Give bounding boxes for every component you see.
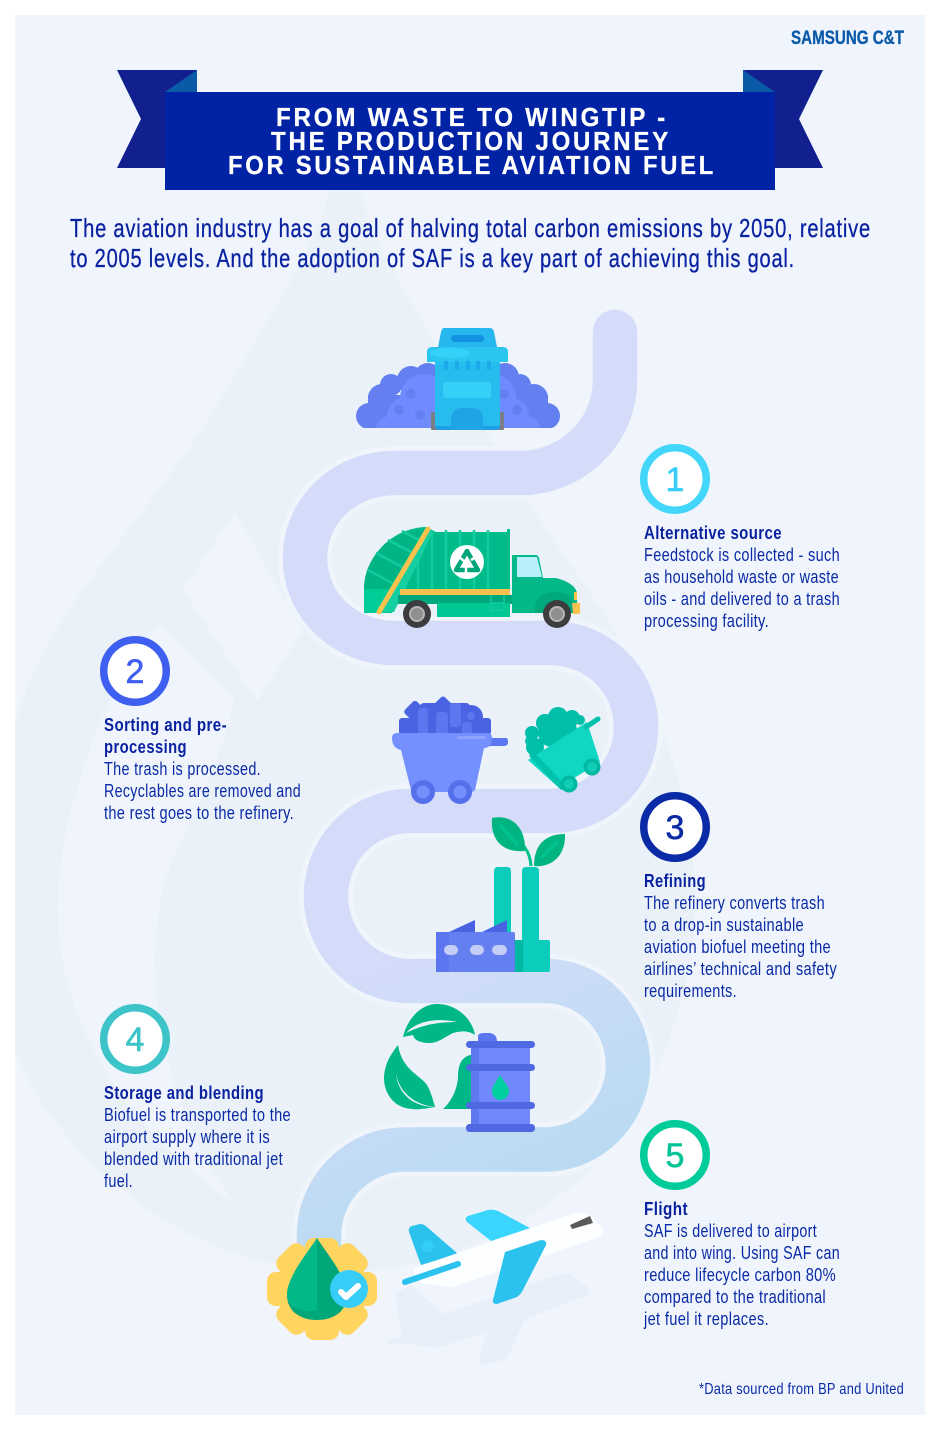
step 5 badge — [644, 1124, 706, 1186]
step 5 text: reduce lifecycle carbon 80% — [644, 1265, 836, 1285]
step 1 text: Alternative source — [644, 523, 782, 543]
step 4 badge: 4 — [126, 1021, 144, 1059]
step 5 text: jet fuel it replaces. — [643, 1309, 769, 1329]
recycling badge — [450, 545, 484, 579]
watermark drop — [0, 135, 695, 1272]
step 1 text: Feedstock is collected - such — [644, 545, 840, 565]
icon: coal cart — [392, 695, 508, 804]
step 4 text — [104, 1083, 291, 1191]
step 5 text — [643, 1199, 840, 1329]
winding road — [305, 332, 636, 1290]
step 1 badge: 1 — [666, 461, 684, 499]
step 4 text: airport supply where it is — [104, 1127, 270, 1147]
title text: FOR SUSTAINABLE AVIATION FUEL — [228, 150, 716, 180]
step 5 text: SAF is delivered to airport — [644, 1221, 817, 1241]
step 3 badge: 3 — [666, 809, 684, 847]
icon: garbage truck — [364, 527, 580, 628]
icon: tipping cart — [525, 707, 600, 792]
step 3 text: aviation biofuel meeting the — [644, 937, 831, 957]
step 3 text: Refining — [644, 871, 706, 891]
title ribbon — [117, 70, 823, 190]
title text — [228, 102, 716, 180]
step 3 text: to a drop-in sustainable — [644, 915, 804, 935]
step 3 text: The refinery converts trash — [644, 893, 825, 913]
step 3 badge — [644, 796, 706, 858]
step 3 text: requirements. — [644, 981, 737, 1001]
intro text — [70, 213, 871, 273]
step 3 text: airlines’ technical and safety — [644, 959, 837, 979]
icon: bio refinery — [436, 817, 565, 972]
logo: Samsung C&T: SAMSUNG C&T — [791, 28, 904, 49]
step 1 text — [644, 523, 840, 631]
step 2 text: processing — [104, 737, 187, 757]
step 5 text: Flight — [644, 1199, 688, 1219]
step 2 text — [104, 715, 301, 823]
step 1 text: oils - and delivered to a trash — [644, 589, 840, 609]
step 4 badge — [104, 1008, 166, 1070]
icon: trash pile and bin — [356, 328, 560, 430]
icon: plane shadow — [388, 1274, 589, 1365]
step 4 text: blended with traditional jet — [104, 1149, 283, 1169]
step 2 text: Recyclables are removed and — [104, 781, 301, 801]
step 4 text: fuel. — [104, 1171, 133, 1191]
step 4 text: Storage and blending — [104, 1083, 264, 1103]
icon: gear with drop and check — [267, 1238, 377, 1340]
step 2 badge — [104, 640, 166, 702]
step 1 text: processing facility. — [644, 611, 769, 631]
step 5 badge: 5 — [666, 1137, 684, 1175]
step 3 text — [644, 871, 837, 1001]
title text: FROM WASTE TO WINGTIP - — [276, 102, 668, 132]
step 1 badge — [644, 448, 706, 510]
step 2 text: The trash is processed. — [104, 759, 261, 779]
step 4 text: Biofuel is transported to the — [104, 1105, 291, 1125]
step 5 text: and into wing. Using SAF can — [644, 1243, 840, 1263]
step 2 badge: 2 — [126, 653, 144, 691]
step 5 text: compared to the traditional — [644, 1287, 826, 1307]
title text: THE PRODUCTION JOURNEY — [271, 126, 671, 156]
step 2 text: the rest goes to the refinery. — [104, 803, 294, 823]
icon: airplane — [405, 1210, 604, 1304]
step 1 text: as household waste or waste — [644, 567, 839, 587]
icon: leaves and barrel — [384, 1004, 535, 1132]
step 2 text: Sorting and pre- — [104, 715, 227, 735]
